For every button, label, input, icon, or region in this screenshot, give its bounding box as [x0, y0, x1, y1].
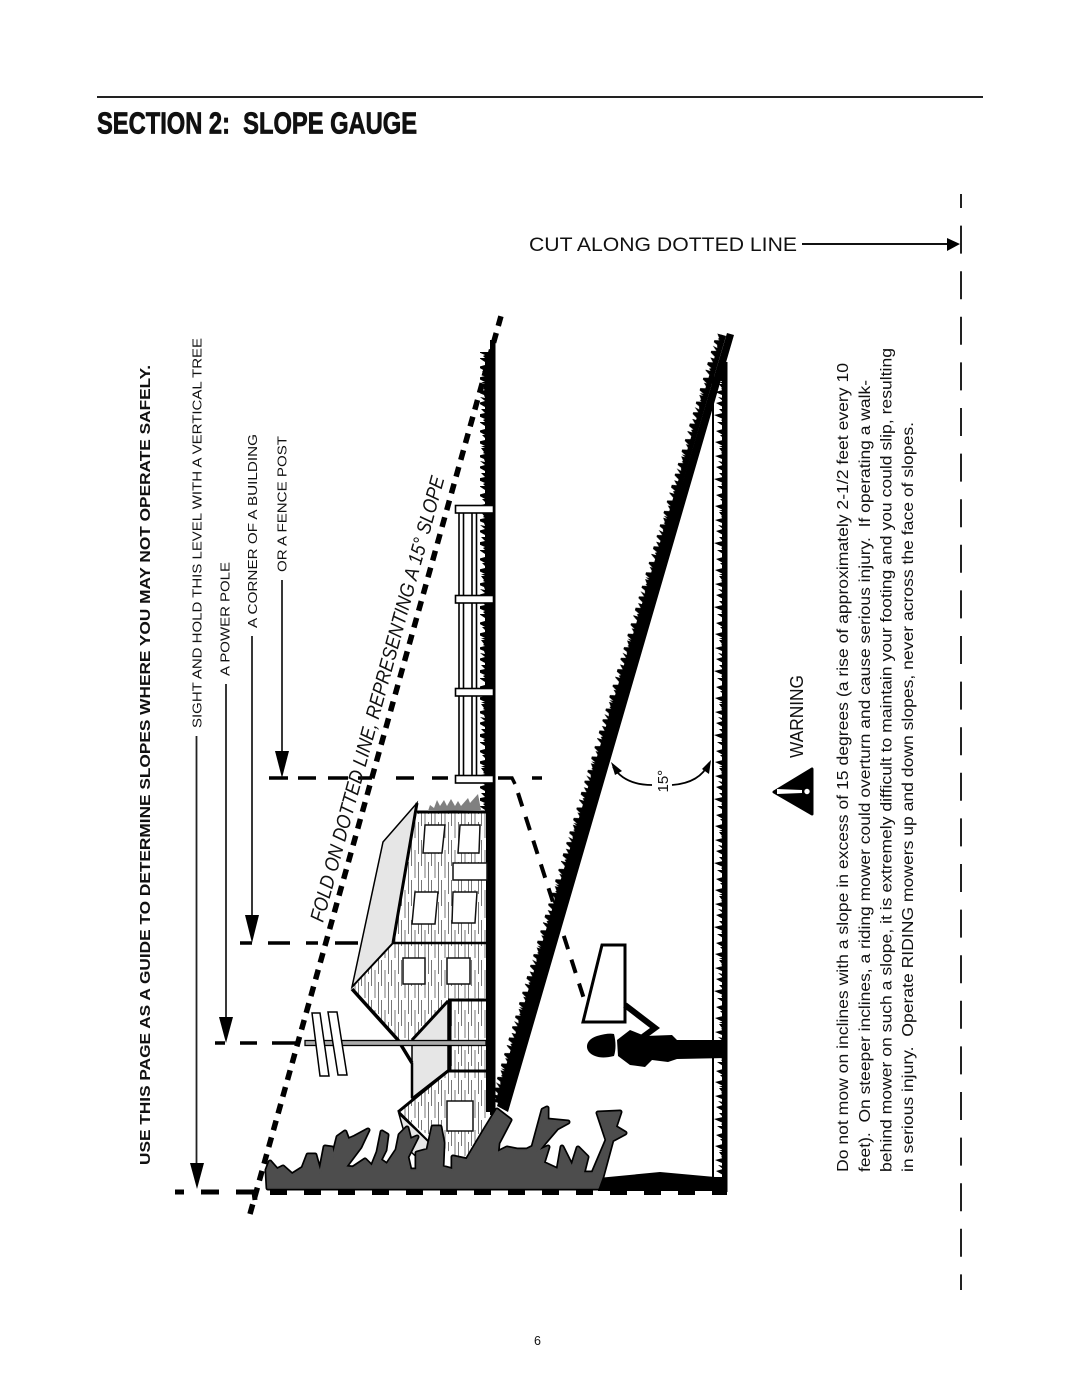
person sighting along gauge	[583, 945, 727, 1067]
sight labels with arrows	[190, 338, 290, 1189]
cut line	[960, 194, 962, 1290]
cut along label with arrow	[529, 234, 960, 256]
angle label: 15°	[655, 770, 672, 792]
warning text: feet). On steeper inclines, a riding mower could overturn and cause serious injury. If operating a walk-	[857, 380, 874, 1172]
slope ground with grass	[491, 333, 734, 1112]
arrow: building	[245, 636, 259, 943]
cut along label with arrow: CUT ALONG DOTTED LINE	[529, 234, 797, 256]
ground: left vertical with grass	[480, 340, 496, 1115]
fold line	[250, 316, 501, 1214]
fold label: FOLD ON DOTTED LINE, REPRESENTING A 15° SLOPE	[307, 473, 450, 924]
header rule	[97, 96, 983, 98]
power pole	[305, 1012, 486, 1076]
warning text: in serious injury. Operate RIDING mowers up and down slopes, never across the face of slopes.	[900, 422, 917, 1172]
bushes	[267, 1108, 625, 1188]
label: building: A CORNER OF A BUILDING	[245, 434, 260, 628]
label: fence post: OR A FENCE POST	[274, 436, 290, 572]
warning text: behind mower on such a slope, it is extremely difficult to maintain your footing and you could slip, resulting	[878, 348, 896, 1172]
label: power pole: A POWER POLE	[218, 562, 232, 676]
warning heading	[774, 675, 812, 814]
arrow: tree	[190, 736, 204, 1189]
warning label: WARNING	[787, 675, 807, 758]
arrow: fence	[275, 580, 289, 778]
arm	[625, 1005, 655, 1039]
warning icon	[774, 769, 812, 814]
roof panels	[352, 803, 448, 1165]
sight board	[583, 945, 625, 1022]
sight level dashed lines	[175, 778, 593, 1200]
windows	[403, 825, 487, 1131]
label: tree: SIGHT AND HOLD THIS LEVEL WITH A VERTICAL TREE	[190, 338, 204, 728]
ground: right vertical with grass	[712, 362, 728, 1192]
warning text: Do not mow on inclines with a slope in excess of 15 degrees (a rise of approximately 2-1/2 feet every 10	[835, 363, 852, 1172]
bottom ground wedge	[270, 1172, 727, 1192]
head	[587, 1034, 616, 1058]
wall hatching	[352, 812, 486, 1160]
guide instruction: USE THIS PAGE AS A GUIDE TO DETERMINE SLOPES WHERE YOU MAY NOT OPERATE SAFELY.	[137, 365, 154, 1165]
angle marker	[611, 760, 711, 792]
body	[617, 1030, 727, 1067]
arrow: pole	[219, 684, 233, 1043]
shrub by wall	[428, 794, 481, 811]
wall and roof outlines	[352, 803, 488, 1143]
title: SECTION 2: SLOPE GAUGE	[97, 106, 417, 140]
fence	[456, 506, 494, 783]
house	[352, 794, 488, 1165]
page number: 6	[534, 1334, 541, 1348]
warning text	[835, 348, 917, 1172]
